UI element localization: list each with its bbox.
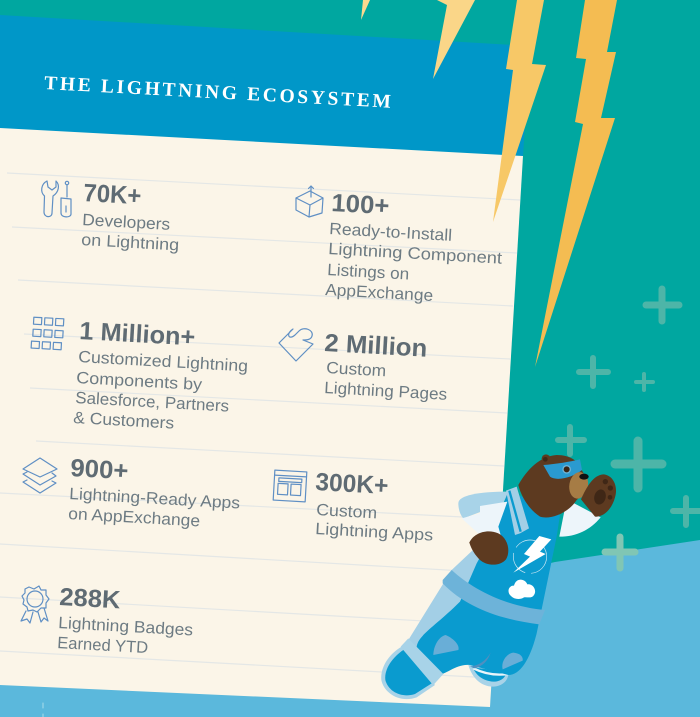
stat: 2 Million pages (279, 329, 448, 404)
belt (443, 570, 545, 624)
stat: 900+ apps: Lightning-Ready Apps (69, 485, 241, 513)
stat: 1 Million+ components: Customized Lightning (78, 348, 249, 375)
icon: box with arrow (296, 186, 323, 217)
emblem: lightning bolt (513, 540, 547, 573)
stat: 288K badges: Lightning Badges (58, 614, 194, 640)
stat: 100+ component listings: Listings on (327, 261, 410, 284)
nose (579, 474, 589, 480)
icon: grid of squares (31, 317, 64, 350)
stat: 100+ component listings: AppExchange (325, 281, 434, 305)
mascot: flying bear (381, 454, 616, 699)
stat: 900+ apps: 900+ (70, 454, 129, 485)
panel: title banner (0, 15, 530, 156)
panel: light blue ground (0, 540, 700, 717)
stat: 70K+ developers: 70K+ (83, 179, 142, 210)
icon: wrench and screwdriver (42, 181, 71, 217)
eye (562, 465, 571, 474)
stat: 1 Million+ components: Components by (76, 369, 203, 394)
torso (417, 490, 560, 675)
stat: 300K+ apps: Custom (316, 501, 378, 522)
stat: 300K+ apps (273, 468, 434, 545)
stat: 300K+ apps: 300K+ (315, 468, 389, 500)
stat: 2 Million pages: Lightning Pages (324, 379, 448, 404)
back leg (468, 665, 508, 687)
stat: 1 Million+ components: & Customers (73, 409, 175, 433)
raised sleeve (559, 499, 601, 537)
rear sleeve and glove (458, 492, 508, 518)
stat: 100+ component listings: Ready-to-Install (329, 220, 453, 245)
mask (543, 459, 582, 479)
panel: stats sheet (0, 128, 523, 707)
stat: 100+ component listings: 100+ (331, 189, 390, 220)
paw (581, 474, 616, 517)
collar stripes (506, 487, 529, 535)
stat: 70K+ developers: Developers (82, 211, 171, 234)
light side of suit (408, 543, 507, 678)
pockets (433, 635, 459, 655)
stat: 288K badges (21, 583, 194, 657)
stat: 1 Million+ components: 1 Million+ (79, 317, 196, 351)
icon: puzzle piece (279, 329, 313, 361)
lightning bolts (361, 0, 617, 367)
stat: 1 Million+ components: Salesforce, Partners (75, 389, 230, 416)
stat: 100+ component listings: Lightning Component (328, 240, 503, 268)
stat: 288K badges: 288K (59, 583, 121, 614)
ear (542, 454, 550, 463)
head (518, 455, 586, 518)
emblem: cloud (509, 580, 535, 599)
stat: 288K badges: Earned YTD (57, 634, 149, 657)
stat: 1 Million+ components (31, 317, 249, 433)
stat: 70K+ developers: on Lightning (81, 231, 180, 254)
stat: 100+ component listings (296, 186, 503, 305)
icon: stacked layers (23, 458, 57, 493)
stat: 900+ apps: on AppExchange (68, 505, 201, 530)
icon: ribbon badge (21, 586, 49, 623)
muzzle (567, 471, 590, 500)
stat: 2 Million pages: 2 Million (324, 329, 428, 363)
left foot and cuff (381, 647, 435, 699)
title: THE LIGHTNING ECOSYSTEM (44, 73, 391, 113)
stat: 300K+ apps: Lightning Apps (315, 520, 434, 545)
plus decorations (43, 289, 700, 717)
stat: 900+ apps (23, 454, 241, 530)
brown arm (469, 531, 508, 565)
icon: app window (273, 470, 307, 502)
stat: 2 Million pages: Custom (326, 359, 387, 380)
stat: 70K+ developers (42, 179, 180, 254)
